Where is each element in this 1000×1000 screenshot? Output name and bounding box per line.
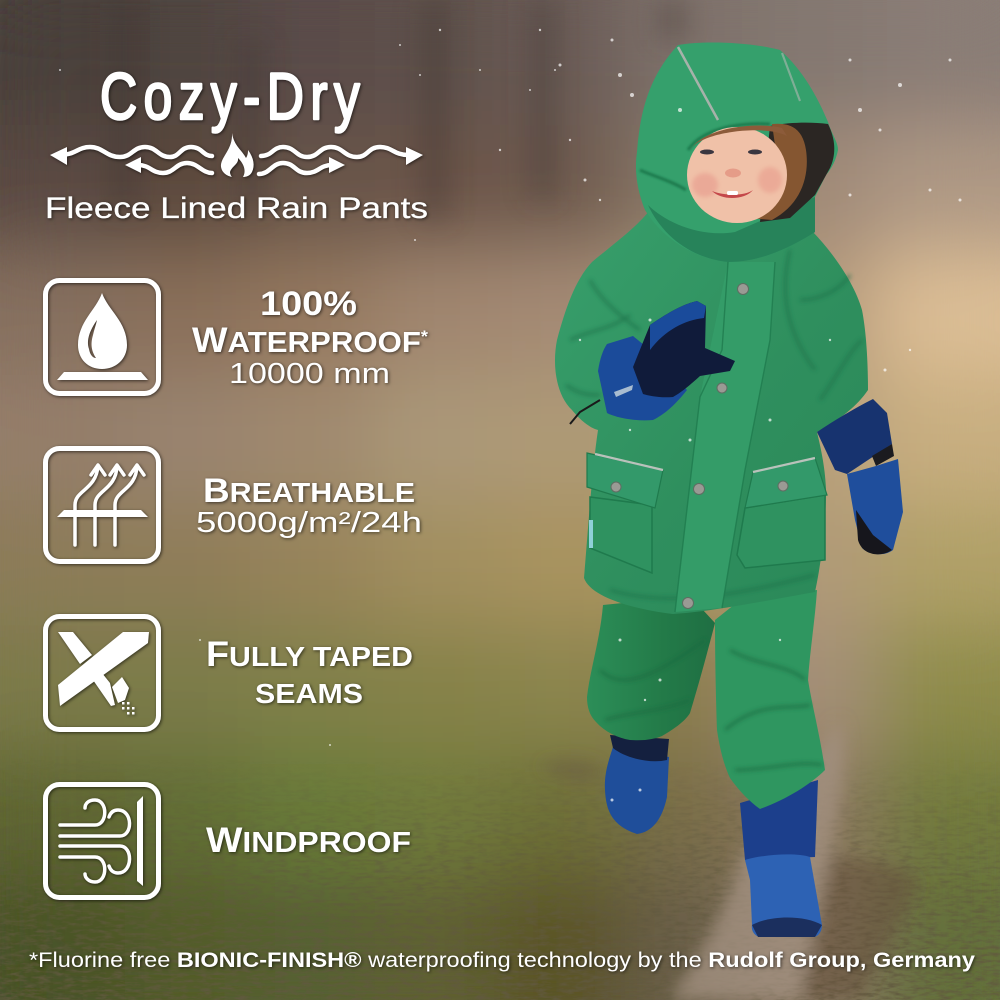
icon: wave arrows and flame	[50, 133, 423, 177]
feature: fully taped seams	[46, 616, 413, 730]
text: breathable: BREATHABLE	[203, 472, 415, 510]
text: breathable	[196, 472, 422, 539]
parka body	[555, 200, 868, 614]
icon: seam tape	[46, 616, 158, 730]
coat label	[589, 520, 593, 548]
text: fully taped seams	[206, 635, 413, 709]
text: fully taped seams: FULLY TAPED	[206, 635, 413, 674]
right boot	[740, 780, 822, 937]
front mitten	[570, 301, 735, 424]
text: breathable: 5000g/m²/24h	[196, 507, 422, 539]
icon: water drop	[46, 280, 158, 394]
snap buttons	[611, 226, 788, 608]
right glove	[817, 399, 903, 554]
text: 100% waterproof: *	[421, 327, 428, 346]
text: fully taped seams: SEAMS	[255, 678, 363, 709]
hair	[748, 124, 807, 220]
icon: breathable membrane arrows	[46, 448, 158, 562]
title: Cozy-Dry	[100, 59, 360, 133]
subtitle: Fleece Lined Rain Pants	[45, 192, 428, 225]
rain pants	[587, 590, 825, 809]
footnote: *Fluorine free BIONIC-FINISH® waterproofing technology by the Rudolf Group, Germany	[29, 949, 975, 972]
right pocket	[737, 458, 827, 568]
text: 100% waterproof: 100%	[260, 285, 357, 323]
sleeve folds	[566, 250, 862, 598]
text: 100% waterproof: WATERPROOF	[192, 321, 407, 360]
child in green rain suit	[555, 42, 903, 937]
text: windproof: WINDPROOF	[206, 821, 411, 860]
feature: windproof	[46, 784, 411, 898]
icon: wind and wall	[46, 784, 158, 898]
front placket	[675, 262, 775, 612]
feature: breathable	[46, 448, 422, 562]
rain speckles	[59, 29, 962, 802]
distant trees	[110, 0, 685, 220]
hood	[636, 42, 838, 262]
face	[687, 126, 787, 223]
text: 100% waterproof	[192, 285, 428, 390]
muddy path	[540, 720, 920, 1000]
text: 100% waterproof: 10000 mm	[229, 358, 390, 390]
left boot	[605, 735, 669, 834]
logo: Cozy-Dry	[45, 59, 428, 225]
feature: waterproof	[46, 280, 428, 394]
left pocket	[587, 453, 663, 573]
